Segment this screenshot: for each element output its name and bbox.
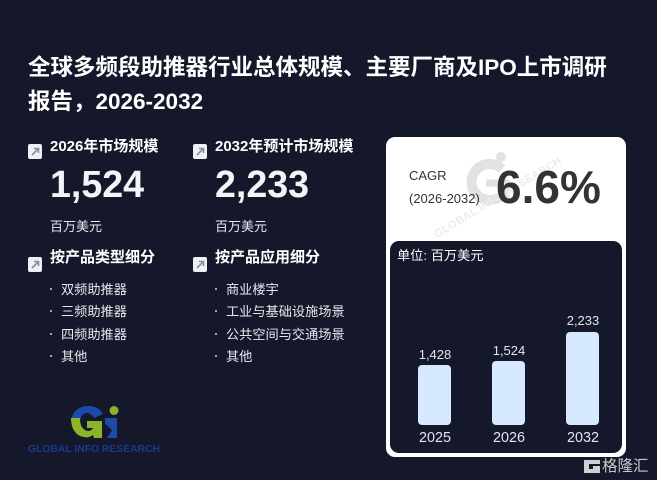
- icon: G mark: [584, 460, 600, 473]
- panel: segmentation by product type: [28, 249, 155, 364]
- value 1,524: 1,524: [493, 343, 525, 358]
- value 1,428: 1,428: [419, 347, 451, 362]
- value: 1,524: 1,524: [50, 163, 144, 205]
- list: product types: 双频助推器: [61, 282, 127, 297]
- year 2026: 2026: [493, 430, 525, 446]
- value 2,233: 2,233: [567, 313, 599, 328]
- icon: arrow 2032: [193, 144, 207, 159]
- heading: by application: 按产品应用细分: [215, 249, 320, 266]
- CAGR label: [409, 168, 480, 206]
- list: applications: 其他: [226, 349, 252, 364]
- heading: 2032 forecast market size: 2032年预计市场规模: [215, 138, 353, 155]
- list: product types: 四频助推器: [61, 327, 127, 342]
- list: applications: 工业与基础设施场景: [226, 304, 345, 319]
- watermark: GLOBAL INFO RESEARCH: [432, 155, 564, 241]
- panel: 2026 market size: [28, 138, 158, 234]
- bar 2026: [492, 343, 525, 446]
- bar 2032: [566, 313, 599, 446]
- watermark text: 格隆汇: [602, 458, 649, 475]
- title: [28, 55, 607, 114]
- heading: 2026 market size: 2026年市场规模: [50, 138, 158, 155]
- icon: arrow 2026: [28, 144, 42, 159]
- list: applications: 商业楼宇: [226, 282, 279, 297]
- year 2025: 2025: [419, 430, 451, 446]
- icon: arrow application: [193, 257, 207, 272]
- value: 2,233: 2,233: [215, 163, 309, 205]
- list: product types: 三频助推器: [61, 304, 127, 319]
- CAGR value: 6.6%: [496, 161, 601, 213]
- title: 报告，2026-2032: [28, 89, 203, 114]
- list: product types: 其他: [61, 349, 87, 364]
- panel: bar chart: [390, 241, 622, 453]
- panel: segmentation by application: [193, 249, 345, 364]
- title: 全球多频段助推器行业总体规模、主要厂商及IPO上市调研: [28, 55, 607, 80]
- logo: Global Info Research: [28, 406, 160, 455]
- list: applications: [215, 282, 345, 364]
- bar 2025: [418, 347, 451, 446]
- panel: 2032 forecast market size: [193, 138, 353, 234]
- panel: CAGR card: [386, 137, 626, 457]
- unit: million USD: 百万美元: [215, 219, 267, 234]
- year 2032: 2032: [567, 430, 599, 446]
- CAGR label: CAGR: [409, 168, 447, 183]
- list: product types: [50, 282, 127, 364]
- list: applications: 公共空间与交通场景: [226, 327, 345, 342]
- chart unit label: 单位: 百万美元: [397, 248, 483, 263]
- CAGR label: (2026-2032): [409, 190, 480, 206]
- watermark: Gelonghui logo: [584, 458, 649, 475]
- unit: million USD: 百万美元: [50, 219, 102, 234]
- heading: by product type: 按产品类型细分: [50, 249, 155, 266]
- icon: arrow product type: [28, 257, 42, 272]
- icon: Gi mark: [71, 406, 118, 438]
- logo text: GLOBAL INFO RESEARCH: [28, 444, 160, 455]
